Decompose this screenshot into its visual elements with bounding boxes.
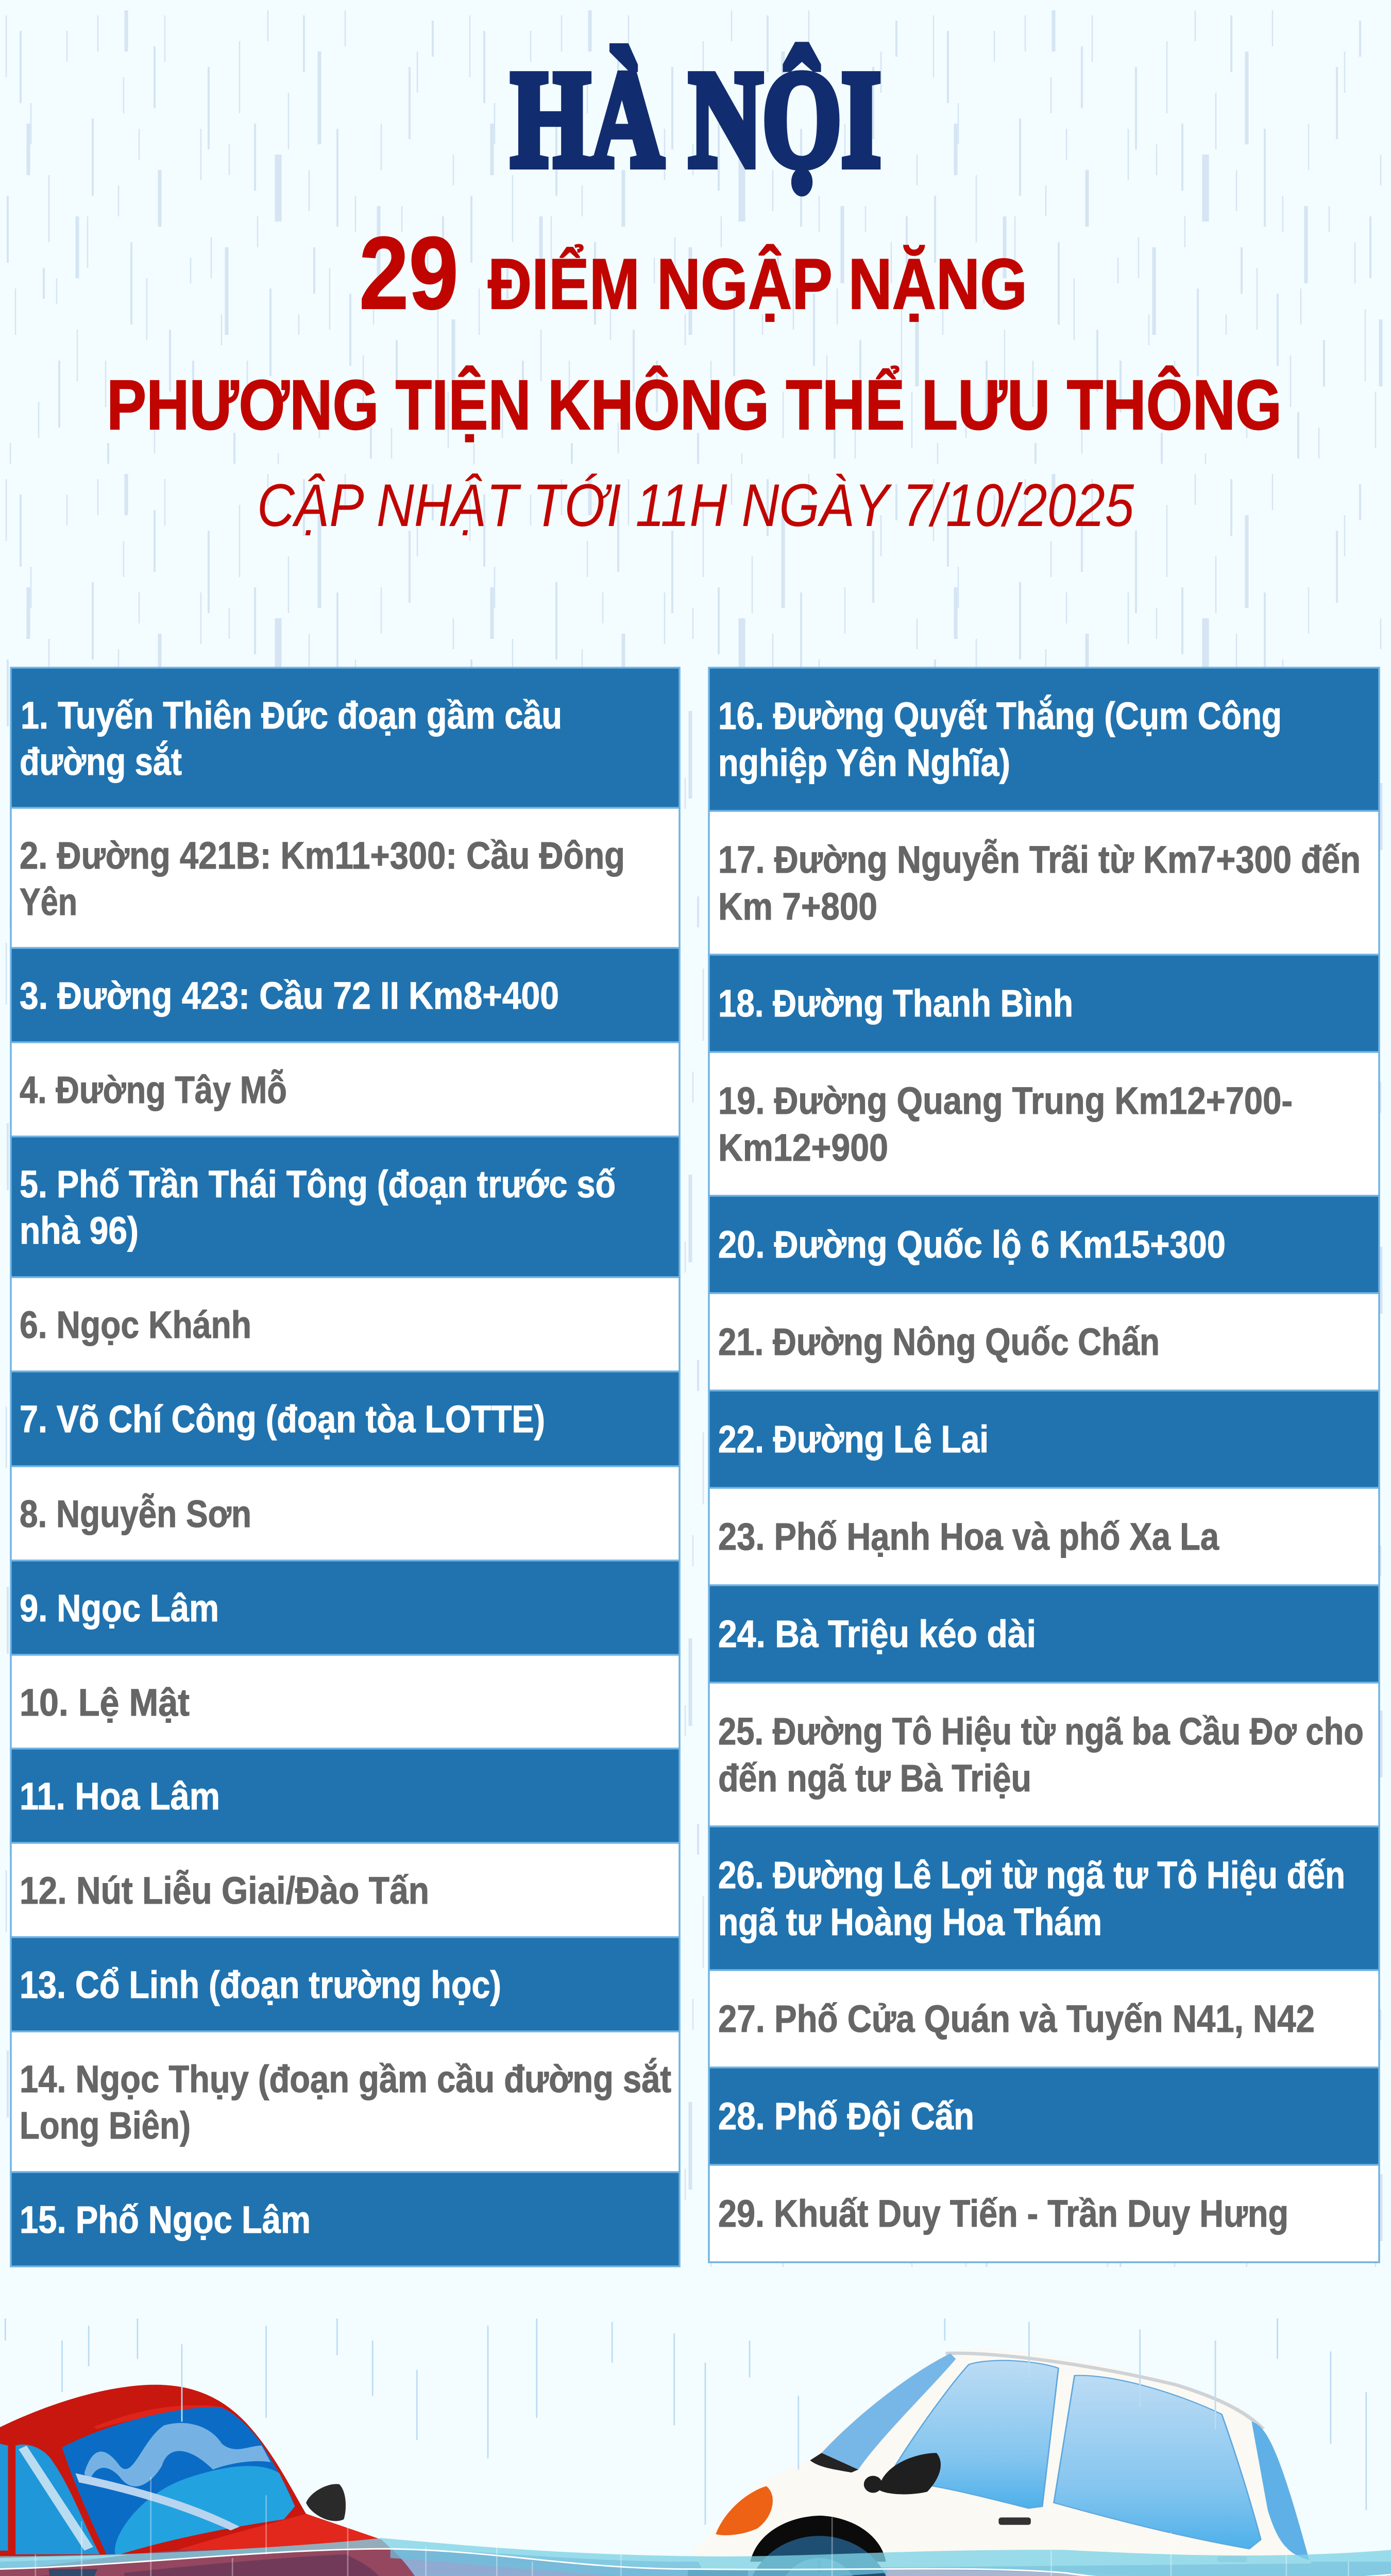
illustration: red flooded car (0, 2384, 415, 2576)
row 15: 15. Phố Ngọc Lâm (20, 2198, 311, 2241)
row 22 (709, 1391, 1379, 1488)
row 4 (11, 1042, 680, 1137)
rear window (1054, 2376, 1261, 2549)
side windows (15, 2445, 100, 2554)
row 8 (11, 1466, 680, 1561)
row 15 (11, 2172, 680, 2266)
row 12 (11, 1843, 680, 1937)
headlight (716, 2486, 773, 2535)
row 7: 7. Võ Chí Công (đoạn tòa LOTTE) (20, 1398, 545, 1440)
panel: right list of flooded points 16-29 (709, 668, 1379, 2262)
row 19: 19. Đường Quang Trung Km12+700- (718, 1079, 1293, 1122)
illustration: white flooded car (687, 2349, 1312, 2576)
rain in the sky (5, 2318, 1366, 2525)
row 25: đến ngã tư Bà Triệu (718, 1757, 1031, 1800)
row 23 (709, 1488, 1379, 1585)
side mirror (306, 2484, 346, 2521)
white water line (0, 2549, 1391, 2576)
row 5 (11, 1137, 680, 1277)
illustration: water surface and rain streaks (0, 2318, 1391, 2576)
row 16: 16. Đường Quyết Thắng (Cụm Công (718, 694, 1282, 737)
row 27 (709, 1970, 1379, 2067)
rear quarter window (1251, 2421, 1309, 2560)
row 17 (709, 811, 1379, 955)
row 18: 18. Đường Thanh Bình (718, 982, 1073, 1025)
row 5: 5. Phố Trần Thái Tông (đoạn trước số (20, 1163, 616, 1206)
row 5: nhà 96) (20, 1209, 139, 1252)
windshield (62, 2407, 295, 2554)
row 3 (11, 948, 680, 1042)
row 17: Km 7+800 (718, 885, 877, 928)
row 10: 10. Lệ Mật (20, 1681, 190, 1724)
row 1: đường sắt (20, 740, 182, 783)
panel: left list of flooded points 1-15 (11, 668, 680, 2266)
row 27: 27. Phố Cửa Quán và Tuyến N41, N42 (718, 1997, 1315, 2040)
row 8: 8. Nguyễn Sơn (20, 1493, 251, 1535)
row 2: Yên (20, 880, 77, 923)
row 26 (709, 1826, 1379, 1970)
row 4: 4. Đường Tây Mỗ (20, 1069, 287, 1111)
row 13: 13. Cổ Linh (đoạn trường học) (20, 1963, 501, 2006)
row 10 (11, 1655, 680, 1749)
row 28 (709, 2067, 1379, 2165)
row 2: 2. Đường 421B: Km11+300: Cầu Đông (20, 834, 625, 877)
front wheel (747, 2536, 892, 2576)
red car body above water (0, 2385, 393, 2558)
rain over the scene (36, 2477, 1380, 2576)
row 12: 12. Nút Liễu Giai/Đào Tấn (20, 1869, 429, 1912)
underwater mirror (49, 2569, 126, 2576)
headline: 29 điểm ngập nặng: 29 (359, 216, 459, 331)
water surface band (0, 2538, 1391, 2576)
headline: 29 điểm ngập nặng: ĐIỂM NGẬP NẶNG (488, 244, 1027, 324)
row 2 (11, 808, 680, 948)
row 14: Long Biên) (20, 2104, 191, 2147)
row 11: 11. Hoa Lâm (20, 1775, 220, 1818)
row 13 (11, 1937, 680, 2031)
row 9: 9. Ngọc Lâm (20, 1587, 219, 1630)
row 18 (709, 955, 1379, 1052)
row 29: 29. Khuất Duy Tiến - Trần Duy Hưng (718, 2192, 1288, 2235)
row 22: 22. Đường Lê Lai (718, 1418, 989, 1461)
headline: 29 điểm ngập nặng (359, 216, 1027, 331)
row 24: 24. Bà Triệu kéo dài (718, 1613, 1036, 1655)
row 16 (709, 668, 1379, 811)
row 21 (709, 1293, 1379, 1391)
subtitle: update time: CẬP NHẬT TỚI 11H NGÀY 7/10/2025 (257, 471, 1134, 539)
row 19: Km12+900 (718, 1126, 888, 1169)
row 9 (11, 1561, 680, 1655)
row 16: nghiệp Yên Nghĩa) (718, 741, 1010, 784)
row 20 (709, 1196, 1379, 1293)
row 6 (11, 1277, 680, 1371)
row 6: 6. Ngọc Khánh (20, 1303, 251, 1346)
row 1: 1. Tuyến Thiên Đức đoạn gầm cầu (21, 694, 562, 737)
row 1 (11, 668, 680, 808)
white car body above water (693, 2349, 1312, 2569)
row 21: 21. Đường Nông Quốc Chấn (718, 1320, 1160, 1363)
door handles (998, 2517, 1031, 2525)
wheel arch (750, 2516, 886, 2562)
row 19 (709, 1052, 1379, 1196)
illustration: flood water body (0, 2549, 1391, 2576)
row 3: 3. Đường 423: Cầu 72 II Km8+400 (20, 974, 559, 1017)
row 11 (11, 1749, 680, 1843)
front side window (895, 2361, 1058, 2509)
row 25 (709, 1683, 1379, 1826)
row 29 (709, 2165, 1379, 2262)
white car lower body under water (886, 2569, 1334, 2576)
row 28: 28. Phố Đội Cấn (718, 2095, 974, 2138)
side mirror (879, 2453, 941, 2494)
row 14 (11, 2031, 680, 2172)
front windshield (822, 2353, 956, 2469)
row 7 (11, 1371, 680, 1466)
red car body under water (0, 2550, 445, 2576)
row 24 (709, 1585, 1379, 1683)
row 23: 23. Phố Hạnh Hoa và phố Xa La (718, 1515, 1219, 1558)
title: HÀ NỘI: HÀ NỘI (511, 43, 881, 195)
row 14: 14. Ngọc Thụy (đoạn gầm cầu đường sắt (20, 2058, 671, 2100)
row 26: ngã tư Hoàng Hoa Thám (718, 1901, 1102, 1943)
row 20: 20. Đường Quốc lộ 6 Km15+300 (718, 1223, 1226, 1266)
